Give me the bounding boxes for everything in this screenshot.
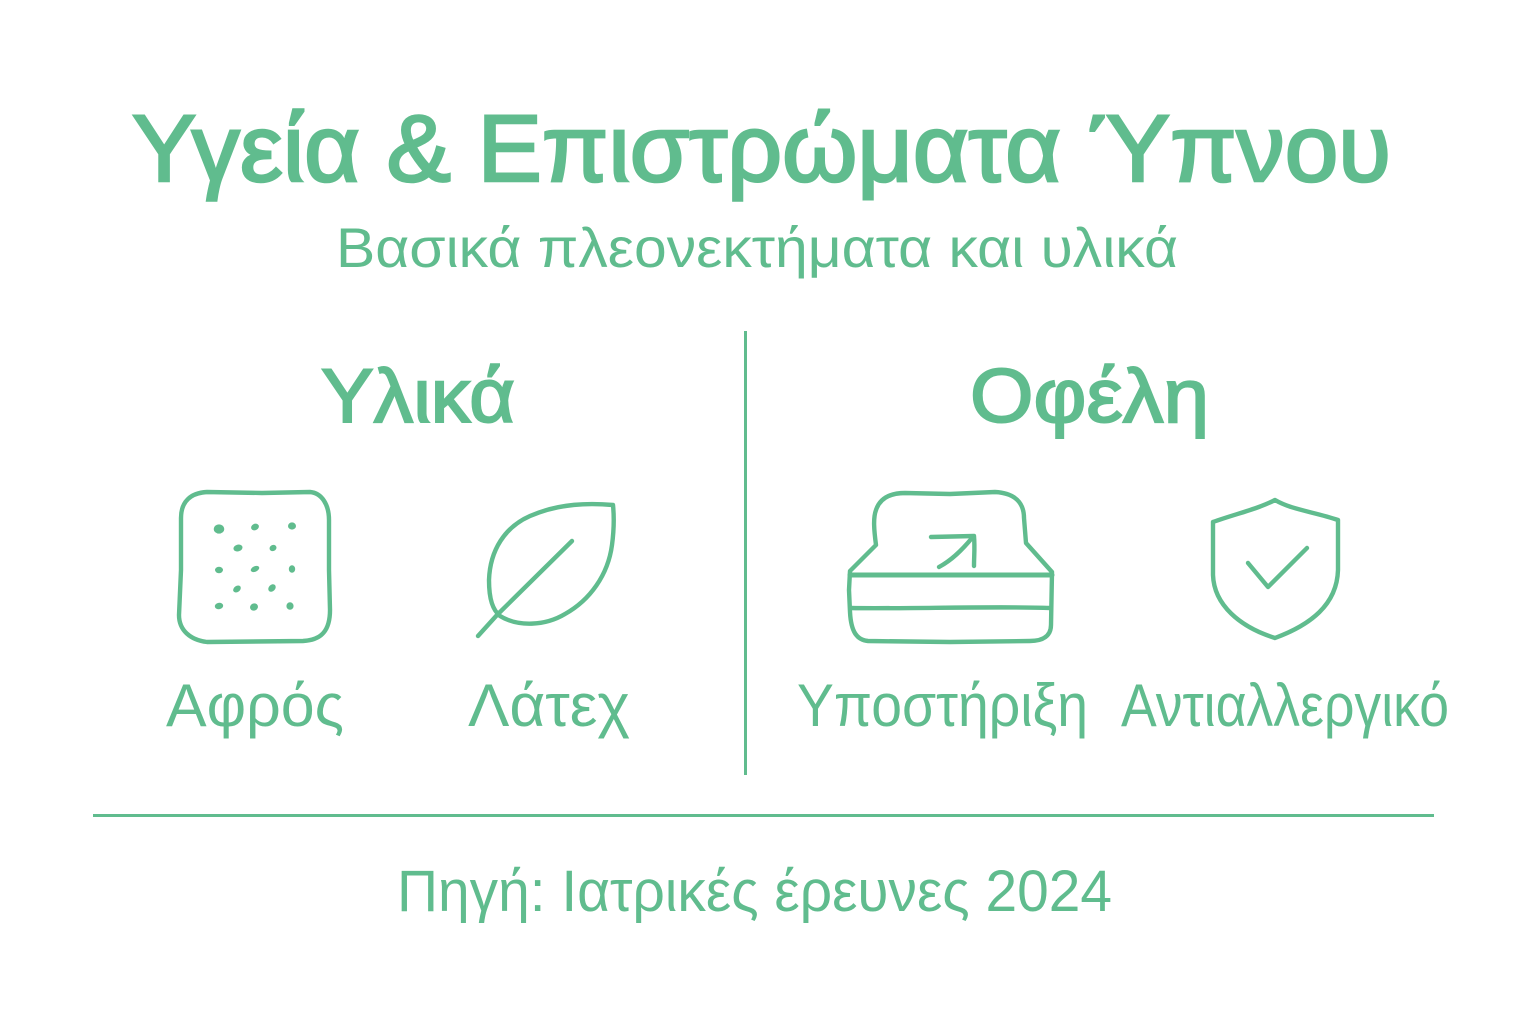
source: Πηγή: Ιατρικές έρευνες 2024 bbox=[397, 859, 1112, 924]
subtitle: Βασικά πλεονεκτήματα και υλικά bbox=[336, 216, 1178, 279]
title: Υγεία & Επιστρώματα Ύπνου bbox=[132, 96, 1391, 202]
heading: materials: Υλικά bbox=[321, 354, 515, 439]
label: antiallergic: Αντιαλλεργικό bbox=[1121, 672, 1449, 739]
icon: shield check bbox=[1213, 500, 1338, 638]
vertical divider bbox=[744, 331, 747, 775]
heading: benefits: Οφέλη bbox=[970, 354, 1209, 439]
icon: foam bbox=[179, 492, 330, 642]
label: foam: Αφρός bbox=[166, 672, 344, 739]
icon: mattress support bbox=[849, 492, 1052, 642]
icon: leaf bbox=[478, 504, 614, 636]
horizontal divider bbox=[93, 814, 1434, 817]
label: latex: Λάτεχ bbox=[468, 672, 630, 739]
label: support: Υποστήριξη bbox=[797, 672, 1088, 739]
